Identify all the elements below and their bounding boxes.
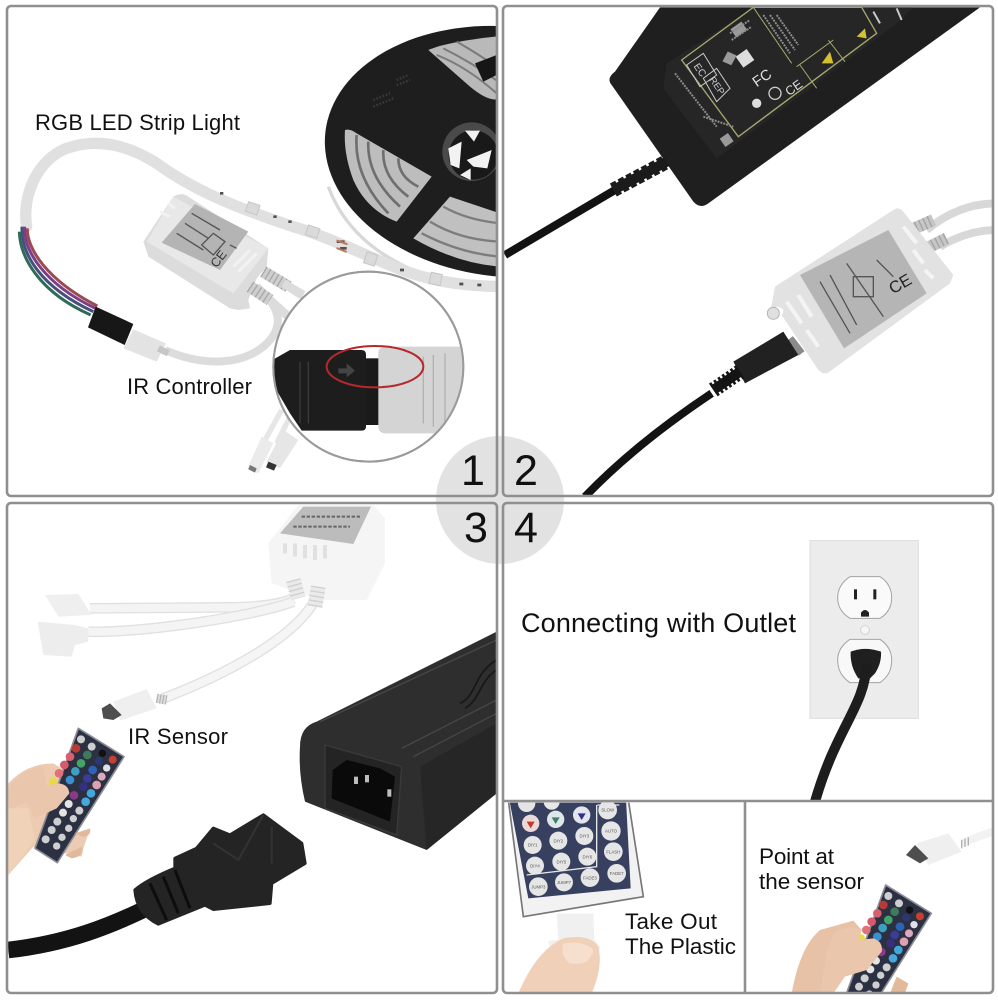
icon: remote with plastic tab: DIY4 (530, 863, 540, 868)
icon: remote with plastic tab: DIY5 (557, 859, 567, 864)
icon: power adapter: EC (691, 62, 708, 79)
illustration: step 1 (18, 26, 496, 474)
heading: IR Controller: IR Controller (127, 374, 252, 399)
icon: sensor, remote and hand (792, 830, 997, 1000)
step numbers: 4 (514, 504, 538, 552)
icon: remote with plastic tab: SLOW (601, 808, 615, 813)
heading: IR Sensor: IR Sensor (128, 724, 228, 749)
icon: DC jack and cable (585, 332, 802, 497)
heading: RGB LED Strip Light: RGB LED Strip Light (35, 110, 240, 135)
icon: remote with plastic tab: FADE3 (583, 875, 597, 880)
icon: remote with plastic tab: DIY3 (580, 834, 590, 839)
text: Take Out The Plastic: Take Out (625, 909, 718, 934)
icon: remote with plastic tab: AUTO (605, 829, 618, 834)
icon: LED strip (26, 143, 500, 287)
icon: IR controller top (268, 505, 385, 600)
number badge background (436, 436, 564, 564)
icon: remote with plastic tab: JUMP7 (557, 880, 572, 885)
icon: IR controller box: CE (886, 270, 915, 298)
icon: remote with plastic tab: FLASH (606, 849, 620, 854)
text: Take Out The Plastic (625, 909, 736, 959)
icon: power adapter: FC (750, 66, 775, 91)
step numbers: 2 (514, 447, 538, 495)
icon: LED strip reel (324, 26, 496, 276)
illustration: step 3 (8, 505, 497, 950)
text: Point at the sensor: Point at (759, 844, 835, 869)
text: Point at the sensor: the sensor (759, 869, 864, 894)
icon: remote with plastic tab: DIY6 (583, 854, 593, 859)
icon: RGB wires (19, 227, 97, 315)
icon: controller cables (903, 203, 997, 252)
step numbers (461, 447, 538, 552)
text: Take Out The Plastic: The Plastic (625, 934, 736, 959)
icon: small connector ends (247, 410, 298, 473)
heading: Connecting with Outlet: Connecting with Outlet (521, 608, 796, 638)
icon: black connector (88, 307, 133, 345)
icon: remote with plastic tab: DIY2 (554, 838, 564, 843)
step numbers: 1 (461, 447, 485, 495)
illustration: step 4 (508, 541, 997, 1000)
icon: IR controller box (767, 208, 953, 373)
icon: power plug and cord (8, 815, 305, 950)
icon: power adapter: CE (783, 77, 805, 99)
icon: remote with plastic tab: DIY1 (528, 843, 538, 848)
icon: white cables and connectors (38, 580, 318, 721)
icon: wall outlet with plug (810, 541, 918, 802)
icon: IR controller box: CE (208, 248, 230, 270)
text: Point at the sensor (759, 844, 864, 894)
illustration: step 2 (505, 7, 997, 497)
icon: adapter with socket (300, 632, 497, 850)
icon: remote with plastic tab (508, 794, 643, 993)
icon: IR controller box (143, 194, 303, 317)
icon: hand with remote (8, 728, 124, 875)
icon: magnifier inset (267, 272, 467, 462)
icon: power adapter: REP (707, 75, 727, 97)
icon: power adapter (609, 7, 980, 206)
step numbers: 3 (464, 504, 488, 552)
icon: remote with plastic tab: JUMP3 (531, 884, 546, 889)
icon: remote with plastic tab: FADE7 (610, 871, 624, 876)
icon: white connector and cable (123, 277, 302, 362)
icon: adapter cord (505, 162, 667, 255)
